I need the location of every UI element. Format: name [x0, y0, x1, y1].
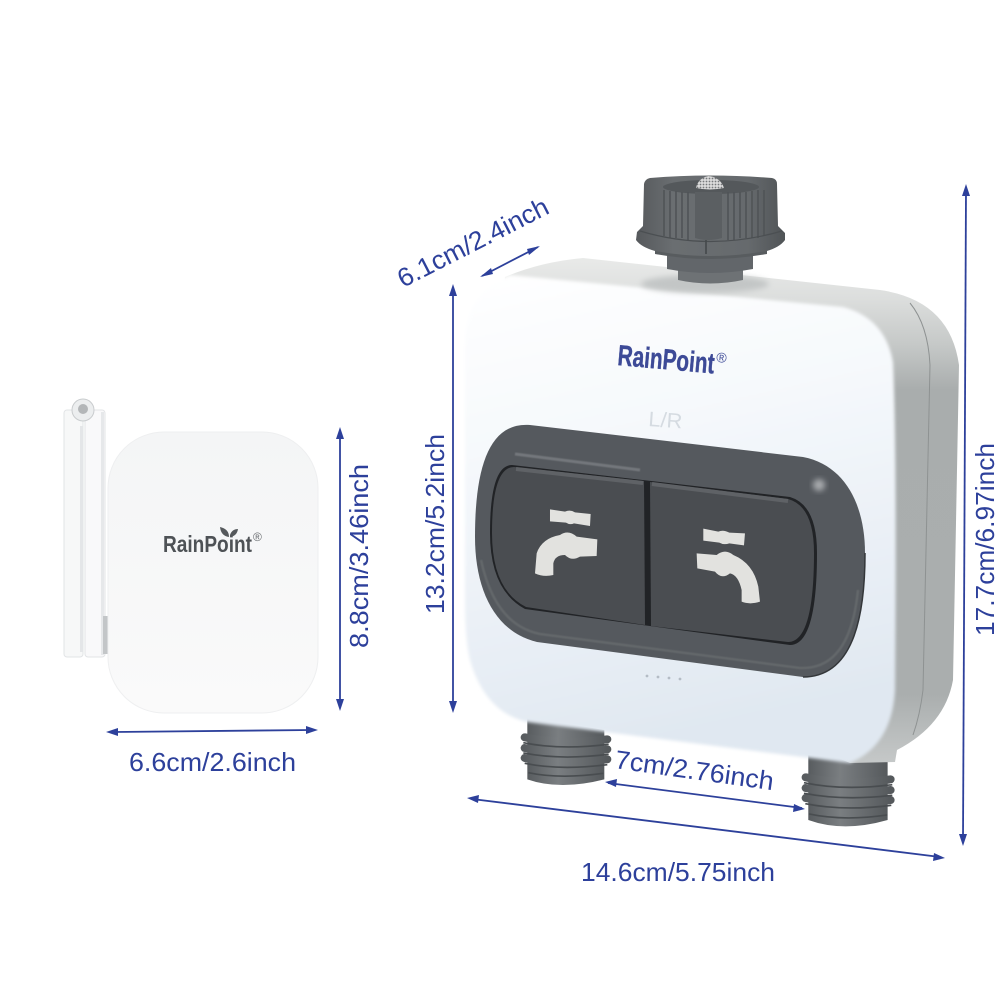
brand logo: RainPoint: ® — [716, 349, 728, 366]
dimension: body height: 13.2cm/5.2inch — [420, 434, 450, 614]
brand logo: RainPoint: RainPoint — [616, 340, 716, 380]
gateway front — [108, 432, 318, 713]
dimension: outlet spacing: 7cm/2.76inch — [613, 744, 776, 796]
dimension: body width: 14.6cm/5.75inch — [581, 857, 775, 887]
dimension: total height: 17.7cm/6.97inch — [970, 443, 1000, 636]
body top and side shell — [500, 258, 959, 763]
dimension: gateway width: 6.6cm/2.6inch — [129, 747, 296, 777]
dimension: body depth: 6.1cm/2.4inch — [392, 191, 554, 293]
dimension: gateway width — [106, 726, 318, 777]
control panel — [475, 425, 865, 677]
body front face — [465, 275, 896, 763]
bottom-left outlet port — [523, 718, 609, 785]
dimension: outlet spacing — [605, 744, 805, 812]
inlet connector nut — [636, 176, 785, 284]
right faucet icon — [697, 529, 760, 603]
left faucet icon — [535, 509, 597, 576]
bezel — [475, 425, 865, 677]
dimension: total height — [959, 184, 1000, 846]
gateway side view clip — [64, 399, 108, 657]
dimension: gateway height: 8.8cm/3.46inch — [344, 464, 374, 648]
filter mesh — [696, 176, 724, 190]
dimension: gateway height — [336, 427, 374, 711]
dimension: body height — [420, 284, 457, 713]
gateway logo: RainPoint — [163, 531, 252, 557]
hinge knob — [72, 399, 94, 421]
L/R embossed label: L/R — [648, 408, 683, 433]
gateway front: ® — [253, 530, 262, 544]
bottom-right outlet port — [804, 755, 892, 826]
status indicator dots — [646, 675, 681, 680]
dimension: body width — [467, 795, 945, 887]
left valve button — [492, 467, 645, 625]
water timer main body — [465, 258, 959, 763]
right valve button — [650, 482, 814, 642]
logo leaf — [220, 527, 238, 537]
